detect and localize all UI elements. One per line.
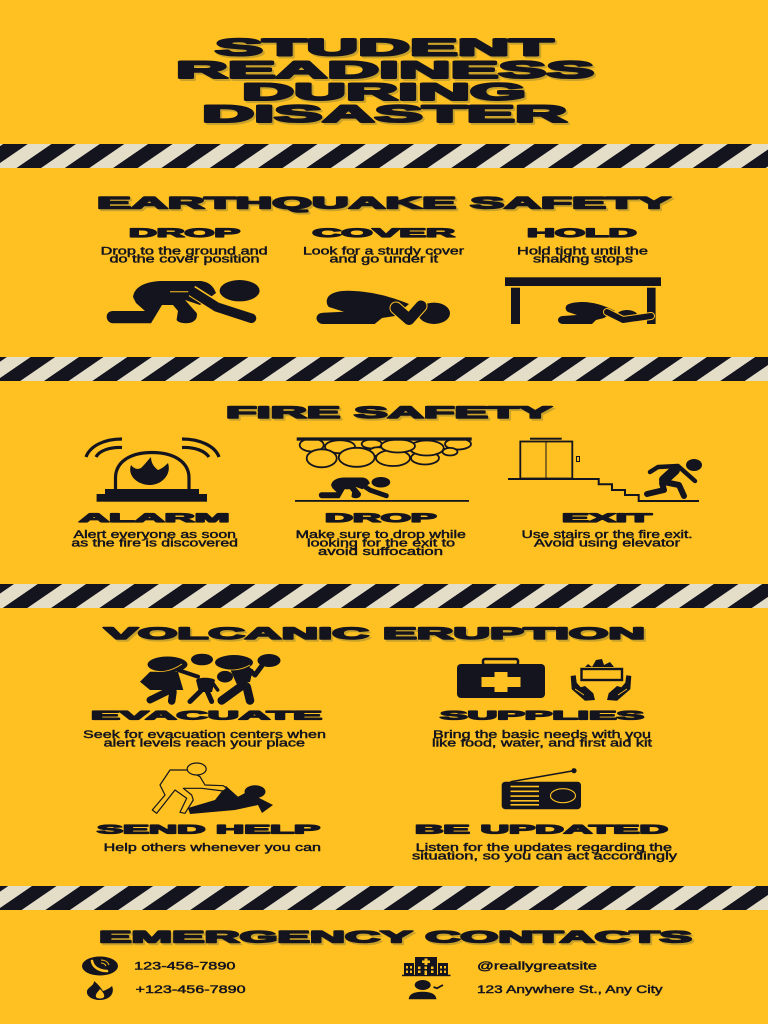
heading: fire safety: FIRE SAFETY [226,403,554,422]
panel: fire safety [71,403,702,558]
step: cover: Look for a sturdy cover [303,245,465,257]
step: alarm [71,439,238,550]
step: drop low under smoke: looking for the exit to [307,538,455,550]
action: supplies [432,659,652,750]
step: exit [508,438,702,550]
step: drop low under smoke: avoid suffocation [318,546,443,558]
contact: phone [82,956,236,976]
title: DISASTER [202,101,568,128]
step: drop: DROP [129,226,240,240]
action: evacuate: alert levels reach your place [104,738,305,750]
action: send help: SEND HELP [97,822,320,836]
contact: fire hotline [87,981,246,1000]
heading: emergency contacts: EMERGENCY CONTACTS [99,928,692,946]
title [176,34,594,128]
contact: fire hotline: +123-456-7890 [136,984,246,996]
step: cover [303,226,465,324]
step: drop low under smoke: DROP [325,511,436,525]
step: exit: EXIT [562,511,653,525]
step: drop [101,226,268,323]
step: alarm: ALARM [79,511,230,525]
step: alarm: Alert everyone as soon [74,529,236,541]
step: exit: Use stairs or the fire exit. [522,529,693,541]
contact: phone: 123-456-7890 [134,960,236,972]
action: be updated: BE UPDATED [415,822,669,836]
action: evacuate: EVACUATE [91,708,322,722]
step: hold [505,226,661,324]
panel: earthquake safety [97,194,673,324]
title: STUDENT [215,34,553,62]
action: be updated: Listen for the updates regarding the [416,842,672,854]
heading: volcanic eruption: VOLCANIC ERUPTION [104,624,645,643]
step: drop: do the cover position [110,254,260,266]
action: be updated: situation, so you can act accordingly [412,850,678,862]
step: hold: shaking stops [533,254,634,266]
action: evacuate: Seek for evacuation centers when [83,729,326,741]
action: send help: Help others whenever you can [104,842,321,854]
contact: address [409,980,663,999]
heading: earthquake safety: EARTHQUAKE SAFETY [97,194,673,212]
step: cover: COVER [312,226,456,240]
step: drop low under smoke: Make sure to drop while [296,529,466,541]
action: be updated [412,768,678,862]
step: hold: Hold tight until the [517,245,648,257]
action: evacuate [83,654,326,750]
title: DURING [242,79,526,106]
step: drop: Drop to the ground and [101,245,268,257]
title: READINESS [176,57,594,84]
contact: hospital website [402,957,597,976]
action: supplies: like food, water, and first aid kit [432,738,652,750]
step: hold: HOLD [527,226,637,240]
step: exit: Avoid using elevator [534,538,681,550]
panel: emergency contacts [82,928,692,1000]
step: alarm: as the fire is discovered [71,538,238,550]
action: supplies: Bring the basic needs with you [433,729,651,741]
contact: address: 123 Anywhere St., Any City [477,984,663,996]
panel: volcanic eruption [83,624,678,862]
contact: hospital website: @reallygreatsite [477,960,597,972]
action: supplies: SUPPLIES [440,708,644,722]
step: cover: and go under it [330,254,438,266]
action: send help [97,763,321,854]
step: drop low under smoke [295,437,472,558]
